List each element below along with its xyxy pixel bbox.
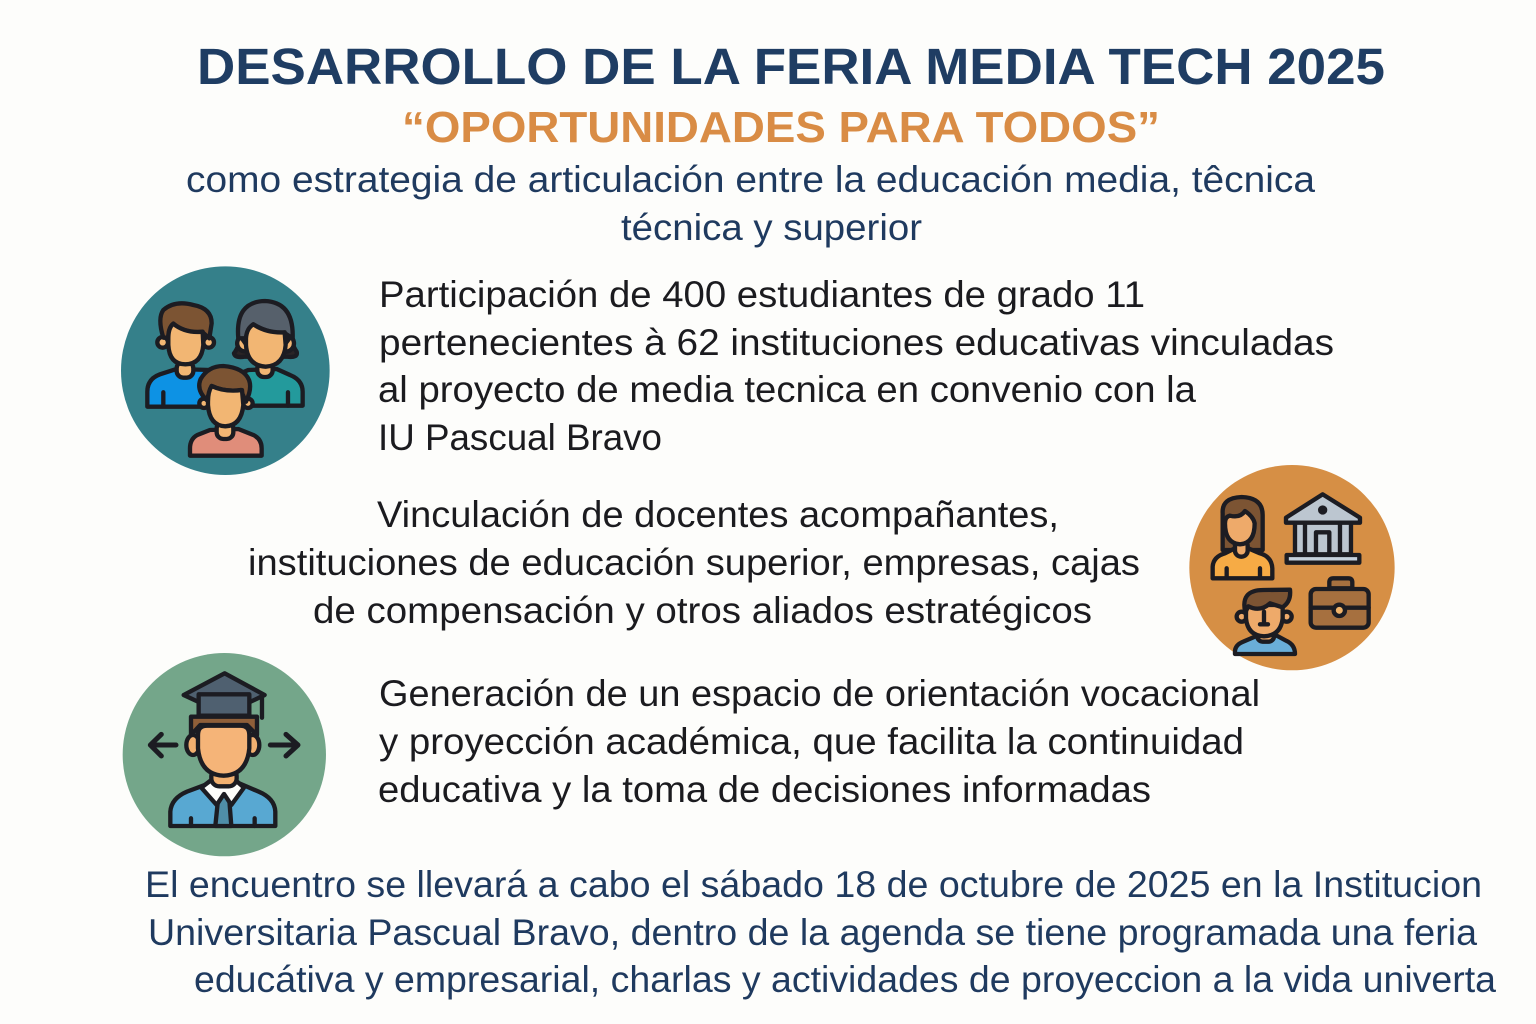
student	[1235, 590, 1295, 654]
icon: graduate with arrows	[123, 653, 326, 856]
icon: three students	[121, 266, 330, 475]
text block: linkage: Vinculación de docentes acompañantes,	[377, 494, 1059, 535]
student: man left	[147, 303, 214, 407]
text block: vocational guidance: y proyección académica, que facilita la continuidad	[379, 721, 1244, 762]
student: front	[190, 366, 262, 456]
text block: participation: al proyecto de media tecnica en convenio con la	[378, 369, 1196, 410]
right arrow	[270, 734, 298, 756]
closing paragraph: Universitaria Pascual Bravo, dentro de la agenda se tiene programada una feria	[148, 912, 1477, 953]
briefcase	[1311, 578, 1369, 628]
text block: participation: IU Pascual Bravo	[378, 417, 662, 458]
text block: participation: pertenecientes à 62 instituciones educativas vinculadas	[379, 322, 1334, 363]
closing paragraph: educátiva y empresarial, charlas y actividades de proyeccion a la vida univerta	[194, 959, 1496, 1000]
title: DESARROLLO DE LA FERIA MEDIA TECH 2025	[197, 38, 1385, 95]
icon: teacher, institution, company and student	[1189, 465, 1395, 670]
student: woman right	[234, 301, 303, 406]
intro text: técnica y superior	[621, 207, 922, 248]
closing paragraph	[145, 864, 1496, 1000]
text block: participation: Participación de 400 estudiantes de grado 11	[379, 274, 1145, 315]
teacher	[1213, 497, 1272, 578]
text block: vocational guidance: educativa y la toma de decisiones informadas	[378, 769, 1151, 810]
text block: participation	[378, 274, 1334, 458]
left arrow	[150, 734, 176, 756]
subtitle: “OPORTUNIDADES PARA TODOS”	[402, 103, 1160, 152]
text block: linkage: instituciones de educación superior, empresas, cajas	[248, 542, 1140, 583]
institution building	[1286, 494, 1360, 563]
text block: vocational guidance	[378, 673, 1260, 810]
closing paragraph: El encuentro se llevará a cabo el sábado 18 de octubre de 2025 en la Institucion	[145, 864, 1482, 905]
text block: vocational guidance: Generación de un espacio de orientación vocacional	[379, 673, 1260, 714]
graduate figure	[170, 673, 275, 826]
text block: linkage: de compensación y otros aliados estratégicos	[313, 590, 1092, 631]
intro text: como estrategia de articulación entre la educación media, têcnica	[186, 159, 1315, 200]
intro text	[186, 159, 1315, 248]
text block: linkage	[248, 494, 1140, 631]
